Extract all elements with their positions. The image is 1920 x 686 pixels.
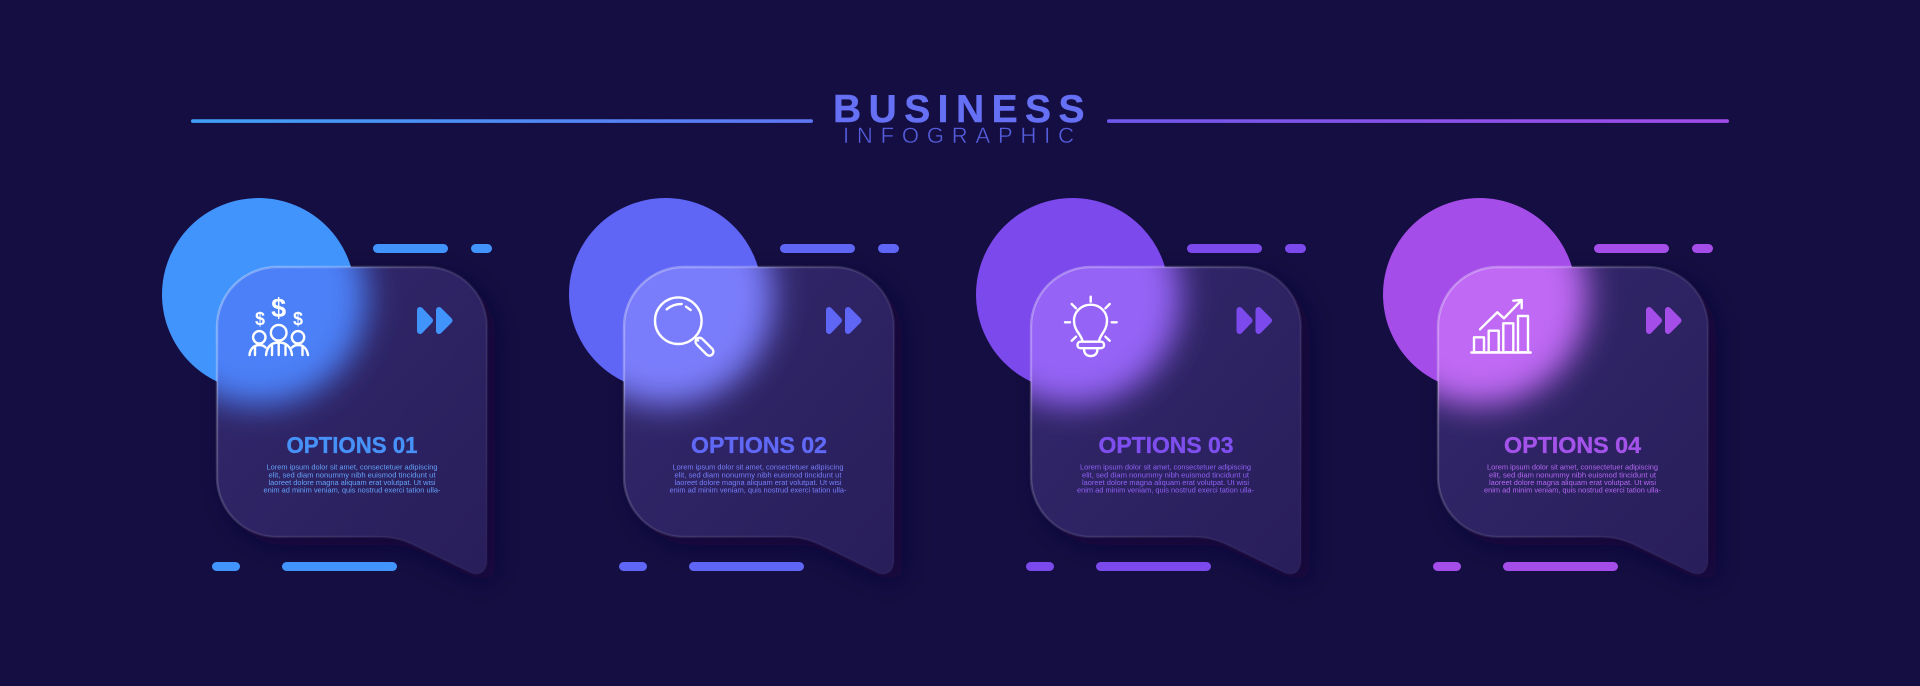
heading: OPTIONS 02 — [691, 432, 827, 458]
body text: enim ad minim veniam, quis nostrud exerci tation ulla- — [670, 486, 847, 495]
panel shadow — [632, 275, 902, 582]
icon: people with money — [250, 293, 308, 355]
glass rim — [624, 267, 894, 574]
backing circle — [162, 198, 355, 391]
glass card — [624, 267, 894, 574]
panel: options 03 — [964, 189, 1309, 582]
panel: options 04 — [1372, 189, 1716, 582]
body text — [1484, 462, 1662, 495]
double arrow — [829, 310, 858, 331]
right title rule — [1107, 119, 1729, 123]
double arrow — [420, 310, 450, 331]
body text: laoreet dolore magna aliquam erat volutpat. Ut wisi — [1082, 478, 1249, 487]
backing circle — [569, 198, 762, 391]
icon: people with money: $ — [271, 293, 286, 323]
double arrow — [1649, 310, 1678, 331]
body text: elit, sed diam nonummy nibh euismod tincidunt ut — [1082, 470, 1249, 479]
top accent bars — [780, 244, 899, 253]
body text: Lorem ipsum dolor sit amet, consectetuer adipiscing — [672, 462, 844, 472]
body text — [670, 462, 847, 495]
bottom accent bars — [619, 562, 804, 571]
panel: options 01 — [150, 189, 495, 582]
body text: elit, sed diam nonummy nibh euismod tincidunt ut — [268, 470, 436, 479]
bottom accent bars — [1433, 562, 1618, 571]
top accent bars — [1187, 244, 1306, 253]
panel: options 02 — [558, 189, 902, 582]
icon: magnifying glass — [655, 297, 715, 357]
body text — [264, 462, 441, 495]
heading: OPTIONS 03 — [1098, 432, 1234, 458]
glass card — [1031, 267, 1301, 574]
top accent bars — [373, 244, 492, 253]
glass rim — [217, 267, 487, 574]
glass rim — [1438, 267, 1708, 574]
icon: growth chart — [1471, 300, 1531, 352]
body text: laoreet dolore magna aliquam erat volutpat. Ut wisi — [1489, 478, 1656, 487]
glass rim — [1031, 267, 1301, 574]
heading: OPTIONS 04 — [1504, 432, 1641, 458]
glass card — [217, 267, 487, 574]
backing circle — [1383, 198, 1576, 391]
title word: business: BUSINESS — [833, 88, 1084, 131]
title — [191, 88, 1729, 148]
body text — [1077, 462, 1255, 495]
panel shadow — [1446, 275, 1716, 582]
body text: laoreet dolore magna aliquam erat volutpat. Ut wisi — [674, 478, 842, 487]
body text: laoreet dolore magna aliquam erat volutpat. Ut wisi — [268, 478, 436, 487]
infographic canvas — [162, 94, 1729, 574]
glass card — [1438, 267, 1708, 574]
backing circle — [976, 198, 1169, 391]
top accent bars — [1594, 244, 1713, 253]
double arrow — [1240, 310, 1269, 331]
body text: Lorem ipsum dolor sit amet, consectetuer adipiscing — [1080, 462, 1251, 472]
bottom accent bars — [1026, 562, 1211, 571]
subtitle: infographic: INFOGRAPHIC — [843, 123, 1074, 148]
body text: enim ad minim veniam, quis nostrud exerci tation ulla- — [264, 486, 441, 495]
panel shadow — [1039, 275, 1309, 582]
heading: OPTIONS 01 — [286, 432, 418, 458]
bottom accent bars — [212, 562, 397, 571]
body text: enim ad minim veniam, quis nostrud exerci tation ulla- — [1077, 486, 1255, 495]
icon: light bulb — [1065, 297, 1117, 356]
body text: elit, sed diam nonummy nibh euismod tincidunt ut — [1489, 470, 1656, 479]
body text: Lorem ipsum dolor sit amet, consectetuer adipiscing — [1487, 462, 1658, 472]
body text: elit, sed diam nonummy nibh euismod tincidunt ut — [674, 470, 842, 479]
body text: enim ad minim veniam, quis nostrud exerci tation ulla- — [1484, 486, 1662, 495]
icon: people with money: $ — [293, 309, 303, 329]
body text: Lorem ipsum dolor sit amet, consectetuer adipiscing — [266, 462, 438, 472]
icon: people with money: $ — [255, 309, 265, 329]
panel shadow — [225, 275, 495, 582]
left title rule — [191, 119, 813, 123]
